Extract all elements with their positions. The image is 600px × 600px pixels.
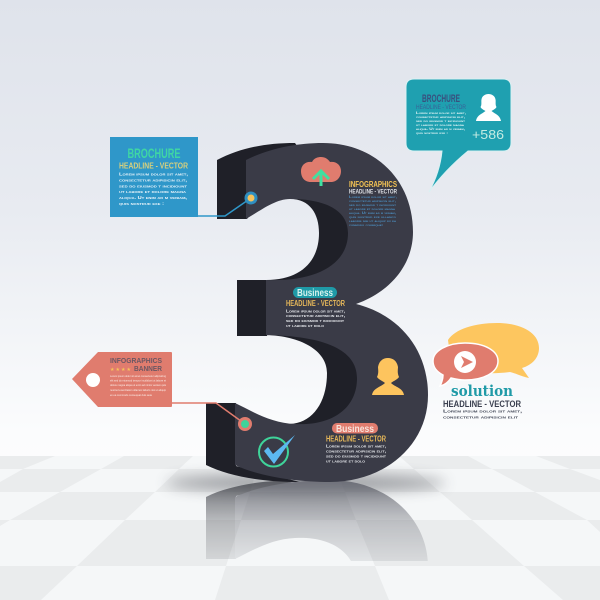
heading: brochure: BROCHURE [128, 145, 180, 161]
text block: business teal: Lorem ipsum dolor sit amet, [286, 308, 345, 314]
body text: consectetur adipisicin elit, [119, 178, 187, 182]
body text: ut labore et dolore magna [416, 123, 465, 127]
body text: quis nostrud exe : [119, 201, 164, 206]
text block: solution: HEADLINE - VECTOR [443, 399, 521, 410]
icon: person white [476, 94, 501, 121]
text block: infographics: quis nostrud exe ullamco [349, 215, 397, 219]
text block: solution: consectetur adipisicin elit [443, 414, 518, 420]
text block: infographics: Lorem ipsum dolor sit amet, [349, 195, 397, 199]
body text: ut labore et dolore magna [119, 189, 187, 194]
body text: ex ea commodo consequat duis aute [110, 393, 152, 397]
tag hole [86, 373, 100, 387]
subheading: HEADLINE - VECTOR [119, 162, 188, 170]
body text: consectetur adipisicin elit, [416, 115, 465, 119]
panel: teal speech bubble [406, 79, 511, 192]
text block: infographics: consectetur adipisicin elit, [349, 199, 396, 203]
text block: solution: Lorem ipsum dolor sit amet, [443, 408, 522, 414]
icon: cloud upload [301, 157, 341, 186]
heading: infographics: INFOGRAPHICS [110, 358, 162, 365]
body text: dolore magna aliqua ut enim ad minim veniam quis [110, 383, 166, 387]
text block: infographics: ut labore et dolore magna [349, 207, 396, 211]
connector: tag to dot [172, 403, 252, 431]
body text: nostrud exercitation ullamco laboris nisi ut aliquip [110, 388, 166, 392]
body text: Lorem ipsum dolor sit amet, [119, 172, 188, 176]
text block: business coral: sed do eiusmod t incidiount [326, 454, 386, 458]
body text [416, 111, 466, 135]
text block: business teal: ut labore et dolo [286, 323, 325, 328]
text block: business coral [326, 423, 386, 464]
text block: business teal [286, 287, 345, 328]
connector: blue box to dot [198, 192, 258, 216]
numeral 3 [206, 143, 428, 482]
text block: business teal: sed do eiusmod t incidiount [286, 318, 344, 323]
subheading: BANNER [134, 366, 162, 373]
text block: business coral: Business [336, 424, 374, 435]
heading: brochure: BROCHURE [422, 93, 460, 105]
body text: aliqua. Ut enim ad m veniam, [119, 195, 187, 200]
text block: business teal: Business [297, 288, 333, 299]
stars: ★★★★ [110, 367, 132, 373]
text block: business coral: ut labore et dolo [326, 458, 366, 464]
icon: solution speech bubbles [433, 323, 539, 386]
text block: infographics: laboris nisi ut aliquip ex ea [349, 219, 397, 223]
numeral 3 front face [235, 143, 428, 482]
body text [119, 172, 188, 206]
icon: person yellow [372, 358, 404, 395]
text block: business coral: Lorem ipsum dolor sit amet, [326, 444, 386, 448]
text block: infographics: INFOGRAPHICS [349, 180, 398, 189]
reflection of numeral 3 [206, 481, 428, 561]
text block: infographics [349, 180, 398, 227]
body text: sed do eiusmod t incidiount [416, 119, 466, 123]
text block: infographics: aliqua. Ut enim ad m veniam, [349, 211, 396, 215]
numeral 3 extruded side [206, 143, 370, 482]
text block: business teal: HEADLINE - VECTOR [286, 299, 345, 308]
body text: elit sed do eiusmod tempor incididunt ut labore et [110, 378, 166, 382]
floor shadow [166, 474, 446, 492]
text block: solution [443, 382, 522, 420]
checkered floor [0, 456, 600, 600]
body text: quis nostrud exe : [416, 131, 448, 135]
body text: Lorem ipsum dolor sit amet, [416, 111, 466, 115]
text block: business coral: consectetur adipisicin elit, [326, 448, 386, 454]
panel: blue brochure box [110, 137, 198, 217]
count: +586 [472, 127, 504, 142]
body text [110, 374, 166, 397]
subheading: HEADLINE - VECTOR [416, 104, 466, 111]
body text: aliqua. Ut enim ad m veniam, [416, 127, 465, 131]
text block: infographics: sed do eiusmod t incidiount [349, 203, 397, 207]
text block: solution: solution [451, 382, 513, 400]
text block: business teal: consectetur adipisicin elit, [286, 313, 345, 318]
text block: business coral: HEADLINE - VECTOR [326, 434, 386, 444]
text block: infographics: commodo consequat [349, 223, 384, 227]
icon: check mark [259, 435, 295, 466]
body text: sed do eiusmod t incidiount [119, 184, 187, 188]
panel: coral tag banner [72, 352, 172, 407]
text block: infographics: HEADLINE - VECTOR [349, 188, 397, 196]
body text: Lorem ipsum dolor sit amet consectetur adipisicing [110, 374, 166, 378]
